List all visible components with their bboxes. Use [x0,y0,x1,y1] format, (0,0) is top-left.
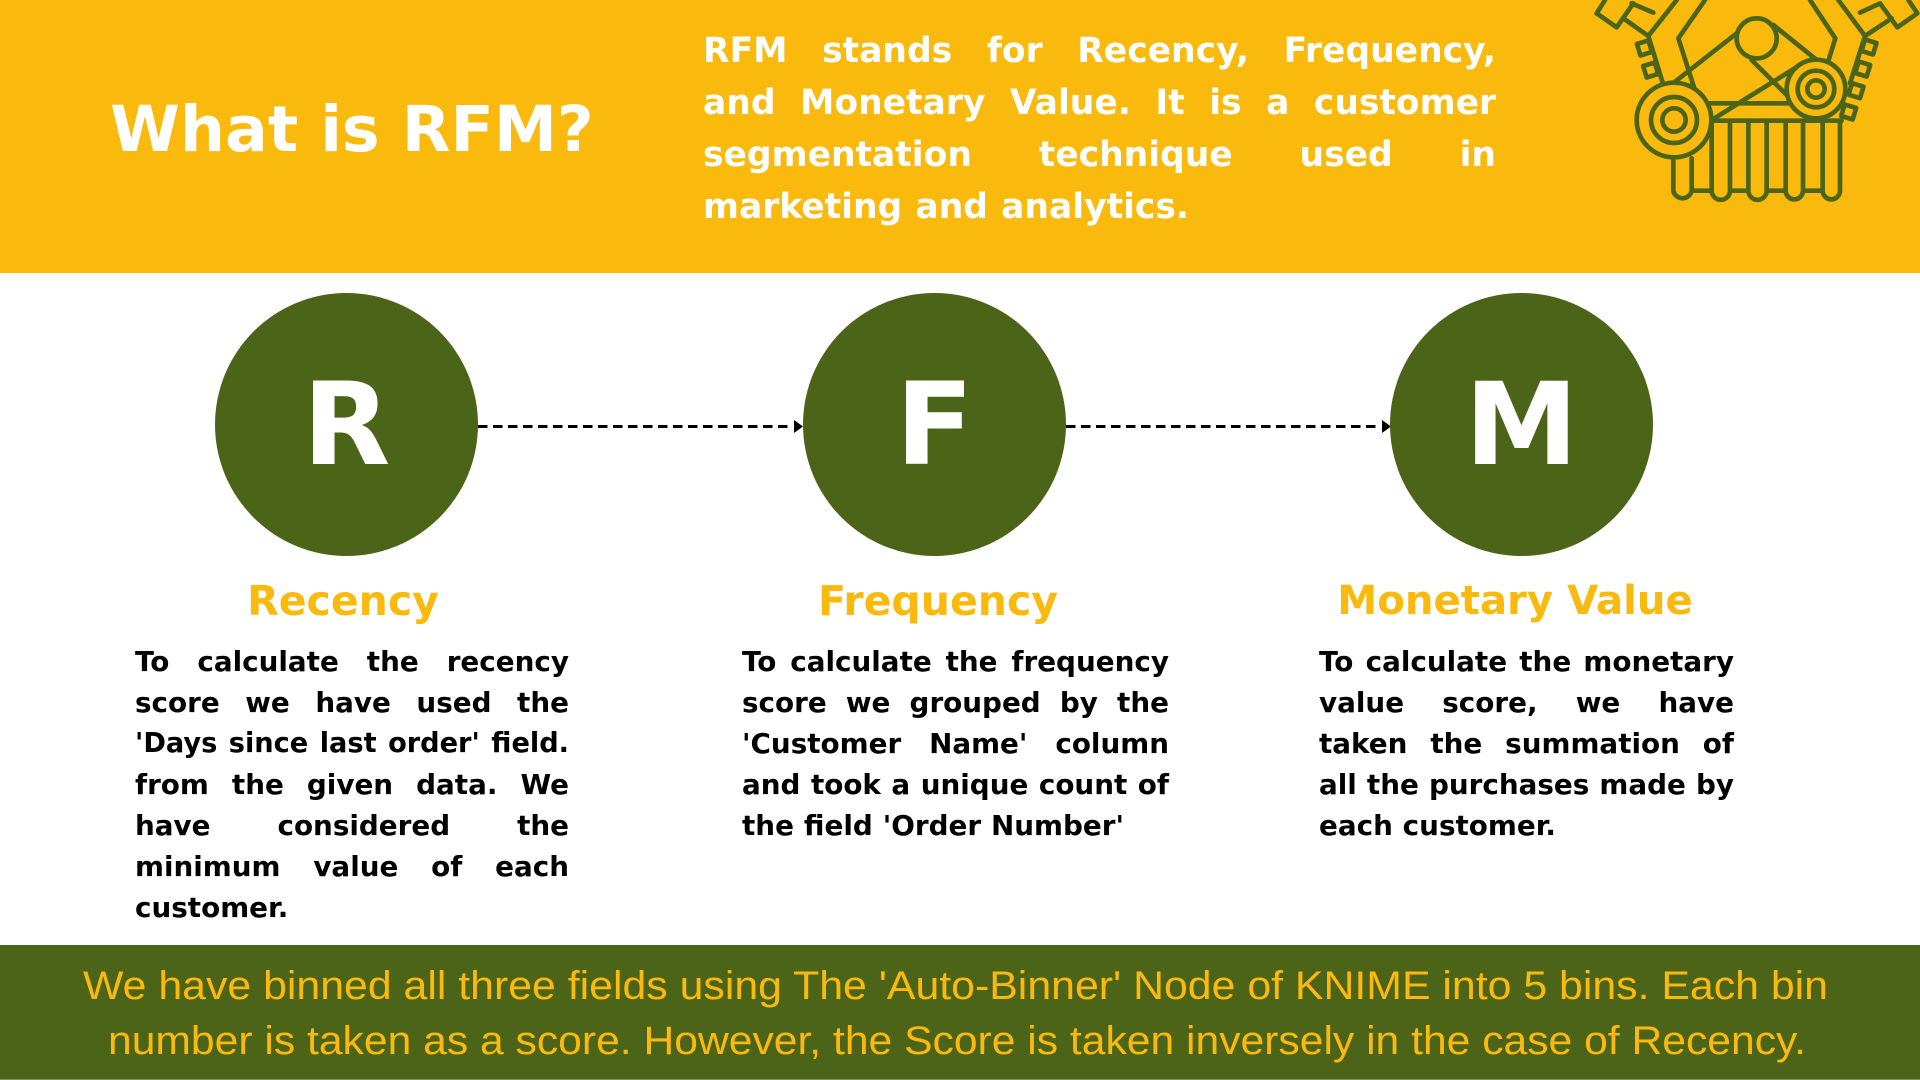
text: monetary value: each customer. [1319,809,1556,842]
header description [703,31,1496,227]
circle: M: M [1465,358,1578,491]
footer band with note [0,945,1920,1080]
text: recency [135,645,569,924]
text: monetary value: value score, we have [1319,686,1734,719]
circle: F [803,293,1066,556]
text: recency: have considered the [135,809,569,842]
header description: and Monetary Value. It is a customer [703,83,1496,123]
text: frequency: the field 'Order Number' [742,809,1124,842]
text: recency: from the given data. We [135,768,569,801]
text: monetary value: all the purchases made by [1319,768,1734,801]
text: recency: customer. [135,891,288,924]
footer band with note: We have binned all three fields using The 'Auto-Binner' Node of KNIME into 5 bins. Each bin [83,964,1828,1008]
text: frequency [742,645,1170,842]
text: monetary value: To calculate the monetary [1319,645,1734,678]
icon: engine [1594,0,1920,202]
text: monetary value [1319,645,1734,842]
heading: Monetary Value: Monetary Value [1337,578,1693,624]
text: frequency: score we grouped by the [742,686,1169,719]
heading: Frequency: Frequency [818,577,1058,625]
circle: M [1390,293,1653,556]
header description: segmentation technique used in [703,135,1496,175]
circle: R [215,293,478,556]
arrow: F to M [1066,420,1390,433]
title: What is RFM? [110,92,594,166]
text: monetary value: taken the summation of [1319,727,1734,760]
header description: marketing and analytics. [703,187,1189,227]
circle: R: R [303,358,390,491]
header description: RFM stands for Recency, Frequency, [703,31,1496,71]
footer band with note: number is taken as a score. However, the Score is taken inversely in the case of Recency. [108,1019,1806,1063]
text: recency: minimum value of each [135,850,569,883]
text: recency: score we have used the [135,686,569,719]
text: frequency: To calculate the frequency [742,645,1169,678]
text: frequency: 'Customer Name' column [742,727,1169,760]
text: frequency: and took a unique count of [742,768,1169,801]
text: recency: To calculate the recency [135,645,569,678]
arrow: R to F [478,420,803,433]
circle: F: F [896,358,973,491]
header band [0,0,1920,273]
text: recency: 'Days since last order' field. [135,728,569,759]
heading: Recency: Recency [247,577,439,625]
